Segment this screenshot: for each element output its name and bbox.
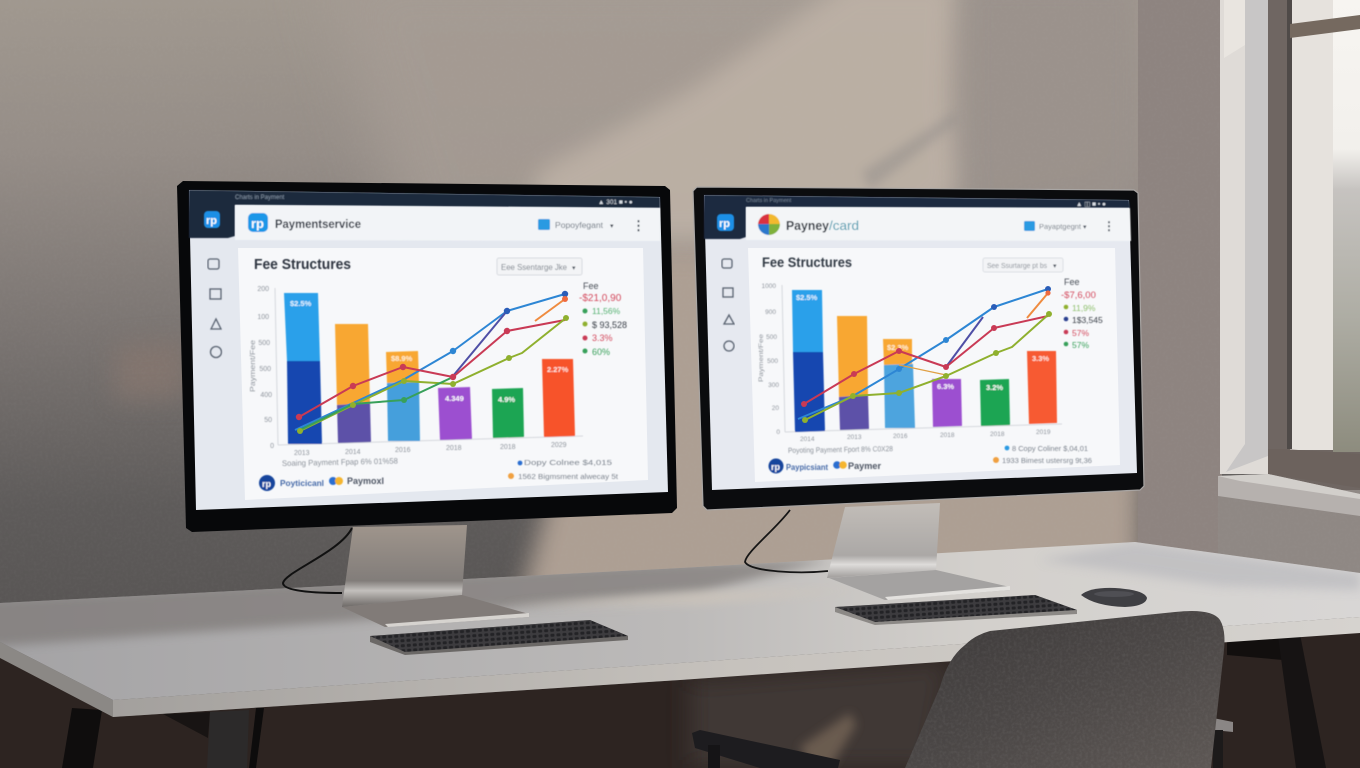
- caption and brand logos: right: rp: [771, 462, 781, 472]
- title: Fee Structures right: Fee Structures: [762, 254, 852, 270]
- legend: left fee values: Fee: [583, 281, 599, 291]
- monitor: left Paymentservice dashboard: [177, 181, 677, 532]
- bar chart: left: 500: [259, 366, 271, 373]
- legend: right fee values: 57%: [1072, 328, 1089, 338]
- bar chart: left: 2.27%: [547, 365, 569, 374]
- caption and brand logos: right: [768, 444, 1092, 474]
- bar chart: left: 4.9%: [498, 395, 515, 404]
- bar chart: left: 100: [257, 314, 269, 321]
- legend: right fee values: 57%: [1072, 340, 1089, 350]
- window with frame, glass and sill: [1218, 0, 1360, 516]
- legend: right fee values: 1$3,545: [1072, 315, 1103, 325]
- bar chart: right: 2018: [990, 431, 1005, 438]
- dropdown: right: [983, 258, 1063, 272]
- header: left: Popoyfegant: [555, 221, 604, 230]
- caption and brand logos: left: Soaing Payment Fpap 6% 01%58: [282, 457, 399, 468]
- header: left: rp: [206, 215, 217, 227]
- line markers: left: [296, 291, 569, 434]
- monitor stand: right: [827, 503, 1010, 600]
- card: right: [748, 248, 1120, 482]
- dropdown: left: ▾: [572, 265, 576, 272]
- header: left: rp: [251, 216, 264, 231]
- bar chart: right: 1000: [762, 283, 776, 290]
- header: right: /card: [829, 218, 859, 233]
- legend: left fee values: 11,56%: [592, 306, 621, 316]
- screen: left: [189, 190, 668, 510]
- caption and brand logos: right: Paymer: [848, 461, 881, 471]
- monitor stand: left: [342, 525, 529, 627]
- monitor: right Payney card dashboard: [693, 187, 1144, 510]
- bar chart: right: 2016: [893, 433, 908, 440]
- bar chart: right: 900: [765, 309, 776, 316]
- title: Fee Structures left: Fee Structures: [254, 256, 351, 273]
- line series: right: [798, 289, 1049, 420]
- bar chart: right: 2018: [940, 432, 955, 439]
- caption and brand logos: left: Poyticicanl: [280, 478, 324, 488]
- header: right: rp: [719, 218, 730, 230]
- bar chart: left: 2018: [500, 444, 516, 451]
- bar chart: right: 0: [776, 429, 780, 436]
- bar chart: right: 2013: [847, 434, 862, 441]
- caption and brand logos: left: Paymoxl: [347, 476, 384, 486]
- top bar: left: Charts in Payment: [235, 195, 285, 201]
- bar chart: right: 500: [767, 358, 778, 365]
- bar chart: left: [250, 286, 583, 457]
- top bar: right: ▲ ◫ ■ ▪ ●: [1076, 201, 1106, 208]
- top bar: right: Charts in Payment: [746, 198, 792, 204]
- legend: left fee values: [579, 281, 627, 357]
- bar chart: left: $2.5%: [290, 299, 312, 308]
- keyboard: right: [835, 595, 1077, 625]
- bar chart: left: Payment/Fee: [250, 340, 257, 392]
- bar chart: right: 2019: [1036, 429, 1051, 436]
- bar chart: left: 4.349: [445, 394, 464, 403]
- header: right: [717, 207, 1131, 241]
- header: right: Payaptgegnt: [1039, 222, 1082, 231]
- bar chart: right: 3.3%: [1032, 354, 1049, 363]
- caption and brand logos: right: 8 Copy Coliner $,04,01: [1012, 446, 1088, 453]
- desk top: [0, 542, 1360, 717]
- bar chart: right: [758, 283, 1062, 443]
- legend: left fee values: $ 93,528: [592, 320, 627, 330]
- bar chart: right: 3.2%: [986, 383, 1003, 392]
- chair: [692, 605, 1233, 768]
- line markers: right: [801, 286, 1052, 423]
- header: right: ▾: [1083, 224, 1087, 231]
- header: left: Paymentservice: [275, 217, 361, 231]
- bar chart: left: 50: [264, 417, 272, 424]
- dropdown: left: [497, 258, 582, 275]
- bar chart: right: $2.3%: [887, 343, 909, 352]
- bar chart: left: 2014: [345, 449, 361, 456]
- mouse: [1081, 588, 1147, 607]
- sidebar icons: right: [722, 259, 734, 351]
- cable: right monitor: [745, 510, 828, 572]
- cable: left monitor: [283, 528, 352, 593]
- top bar: right: [704, 195, 1130, 239]
- caption and brand logos: left: [259, 457, 618, 491]
- caption and brand logos: right: Paypicsiant: [786, 463, 828, 472]
- bar chart: left: 2013: [294, 450, 310, 457]
- bar chart: left: 500: [258, 340, 270, 347]
- legend: right fee values: [1061, 277, 1103, 350]
- sidebar icons: left: [208, 259, 222, 358]
- bar chart: right: 6.3%: [937, 382, 954, 391]
- bar chart: right: 2014: [800, 436, 815, 443]
- bar chart: left: 0: [270, 443, 274, 450]
- caption and brand logos: left: Dopy Colnee $4,015: [524, 460, 612, 467]
- legend: left fee values: 3.3%: [592, 333, 613, 343]
- header: left: ⋮: [632, 218, 645, 233]
- top bar: left: [189, 190, 660, 238]
- bar chart: left: 2018: [446, 445, 462, 452]
- caption and brand logos: right: Poyoting Payment Fport 8% C0X28: [788, 444, 893, 455]
- card: left: [238, 248, 648, 500]
- bar chart: left: 400: [260, 392, 272, 399]
- caption and brand logos: right: 1933 Bimest ustersrg 9t,36: [1002, 458, 1092, 465]
- bar chart: right: $2.5%: [796, 293, 818, 302]
- top bar: left: ▲ 301 ■ ▪ ●: [598, 199, 633, 206]
- legend: right fee values: Fee: [1064, 277, 1080, 287]
- bar chart: left: 2016: [395, 447, 411, 454]
- header: left: [204, 205, 660, 241]
- caption and brand logos: left: 1562 Bigmsment alwecay 5t: [518, 474, 618, 481]
- dropdown: right: See Ssurtarge pt bs: [987, 261, 1047, 270]
- header: right: Payney: [786, 218, 830, 233]
- bar chart: left: 200: [257, 286, 269, 293]
- bar chart: right: 20: [772, 405, 779, 412]
- dropdown: left: Eee Ssentarge Jke: [501, 263, 568, 272]
- legend: left fee values: 60%: [592, 347, 610, 357]
- legend: left fee values: -$21,0,90: [579, 293, 622, 304]
- keyboard: left: [370, 620, 628, 655]
- bar chart: right: Payment/Fee: [758, 334, 765, 382]
- legend: right fee values: -$7,6,00: [1061, 290, 1096, 301]
- bar chart: left: 2029: [551, 442, 567, 449]
- bar chart: right: 500: [766, 334, 777, 341]
- area beneath desk: [0, 630, 1360, 768]
- bar chart: right: 300: [768, 382, 779, 389]
- caption and brand logos: left: rp: [262, 479, 272, 489]
- screen: right: [704, 195, 1137, 490]
- header: right: ⋮: [1103, 219, 1115, 233]
- bar chart: left: $8.9%: [391, 354, 413, 363]
- desk legs: [62, 634, 1326, 768]
- header: left: ▾: [610, 223, 614, 230]
- dropdown: right: ▾: [1053, 263, 1057, 270]
- legend: right fee values: 11,9%: [1072, 303, 1096, 313]
- line series: left: [295, 294, 566, 431]
